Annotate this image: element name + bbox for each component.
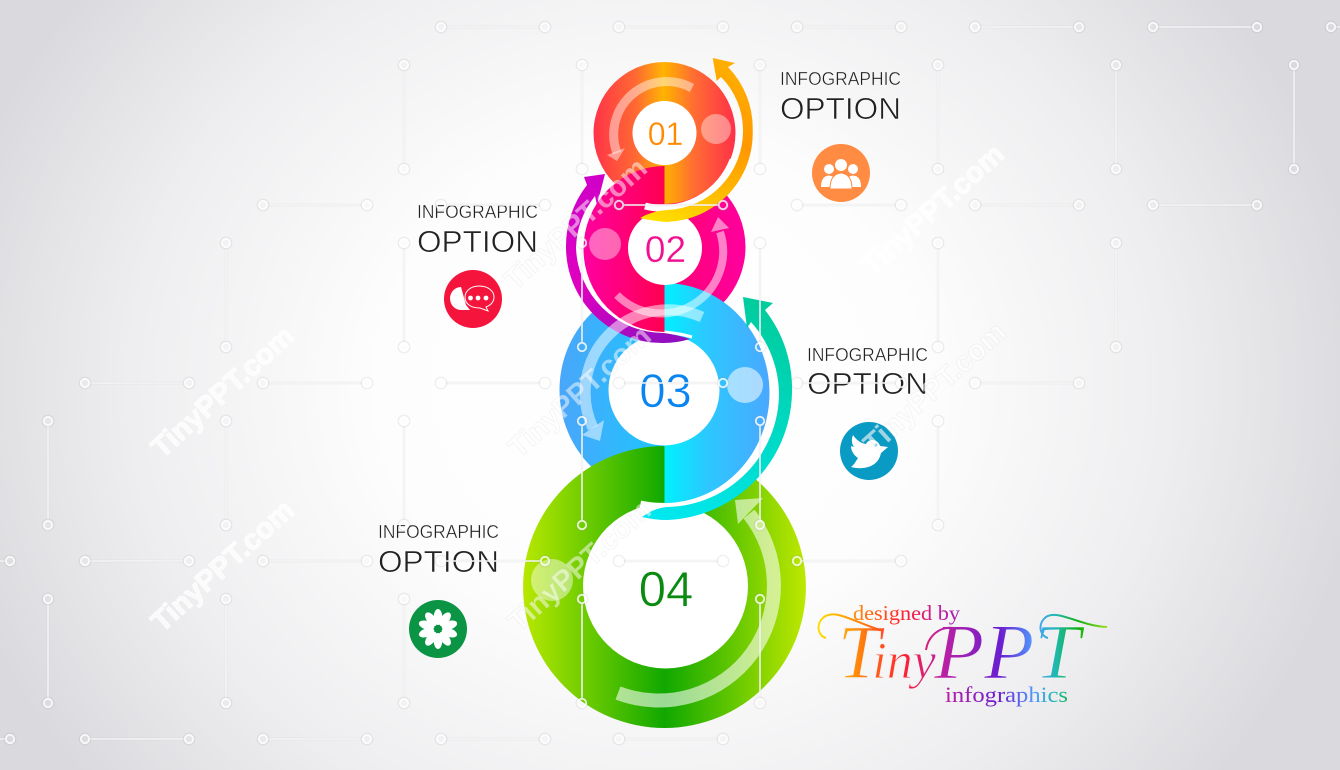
ring 02 gap (580, 196, 692, 337)
label: option 3: OPTION (807, 366, 928, 401)
label: option 2: OPTION (417, 224, 538, 259)
arrow: ring 03 teal (642, 297, 792, 520)
ring 01 left half (594, 62, 664, 204)
watermark 4: TinyPPT.com (502, 320, 658, 464)
translucent dots (531, 114, 763, 601)
inner arrow 04 (618, 498, 774, 701)
logo wordmark: PPT: PPT (933, 608, 1085, 695)
icon: bird (840, 422, 898, 480)
stacked ring chart (523, 62, 806, 728)
ring 01 right half (664, 62, 735, 204)
ring 01 gap (645, 160, 733, 208)
arrow: ring 01 orange (640, 58, 753, 222)
icon: speech bubbles (444, 270, 502, 328)
watermark 5: TinyPPT.com (502, 494, 658, 638)
label: option 1 (780, 69, 901, 126)
label: option 3: INFOGRAPHIC (807, 345, 928, 365)
number 01: 01 (648, 116, 683, 152)
label: option 4: INFOGRAPHIC (378, 522, 499, 542)
dot 03 (727, 367, 763, 403)
number 04: 04 (639, 563, 693, 617)
dot 04 (531, 559, 573, 601)
number 02: 02 (645, 229, 686, 270)
ring 01 hole (632, 101, 696, 165)
dot 01 (701, 114, 731, 144)
ring 03 hole (608, 334, 720, 446)
watermark 3: TinyPPT.com (498, 152, 654, 296)
logo swashes (818, 614, 1107, 650)
watermark 6: TinyPPT.com (855, 138, 1011, 282)
ring 04 disc (523, 446, 806, 728)
icon: people (812, 144, 870, 202)
ring 03 right half (664, 283, 770, 503)
label: option 4 (378, 522, 499, 579)
dot 02 (589, 228, 621, 260)
logo wordmark: Tiny: Tiny (838, 611, 937, 695)
watermark 7: TinyPPT.com (857, 316, 1013, 460)
label: option 2: INFOGRAPHIC (417, 202, 538, 222)
ring 02 hole (628, 211, 702, 285)
label: option 2 (417, 202, 538, 259)
inner arrow 02 (617, 217, 729, 313)
watermarks (145, 138, 1013, 638)
watermark 1: TinyPPT.com (145, 320, 301, 464)
arrow: ring 02 purple (566, 174, 690, 343)
icon: flower (409, 600, 467, 658)
inner arrow 03 (582, 310, 702, 441)
inner translucent arrows (582, 82, 774, 701)
labels: infographic options (378, 69, 928, 579)
logo caption: designed by: designed by (853, 601, 961, 625)
number 03: 03 (639, 364, 692, 417)
ring 03 gap (640, 324, 775, 508)
ring 03 left half (560, 283, 664, 497)
ring 04 hole (583, 504, 748, 668)
label: option 1: INFOGRAPHIC (780, 69, 901, 89)
ring 02 right half (664, 166, 746, 328)
inner arrow 01 (607, 82, 692, 161)
ring 02 left half (584, 166, 664, 332)
label: option 1: OPTION (780, 91, 901, 126)
label: option 3 (807, 345, 928, 401)
label: option 4: OPTION (378, 544, 499, 579)
logo: designed by TinyPPT infographics (818, 601, 1107, 707)
watermark 2: TinyPPT.com (145, 494, 301, 638)
logo caption: infographics: infographics (945, 682, 1068, 707)
